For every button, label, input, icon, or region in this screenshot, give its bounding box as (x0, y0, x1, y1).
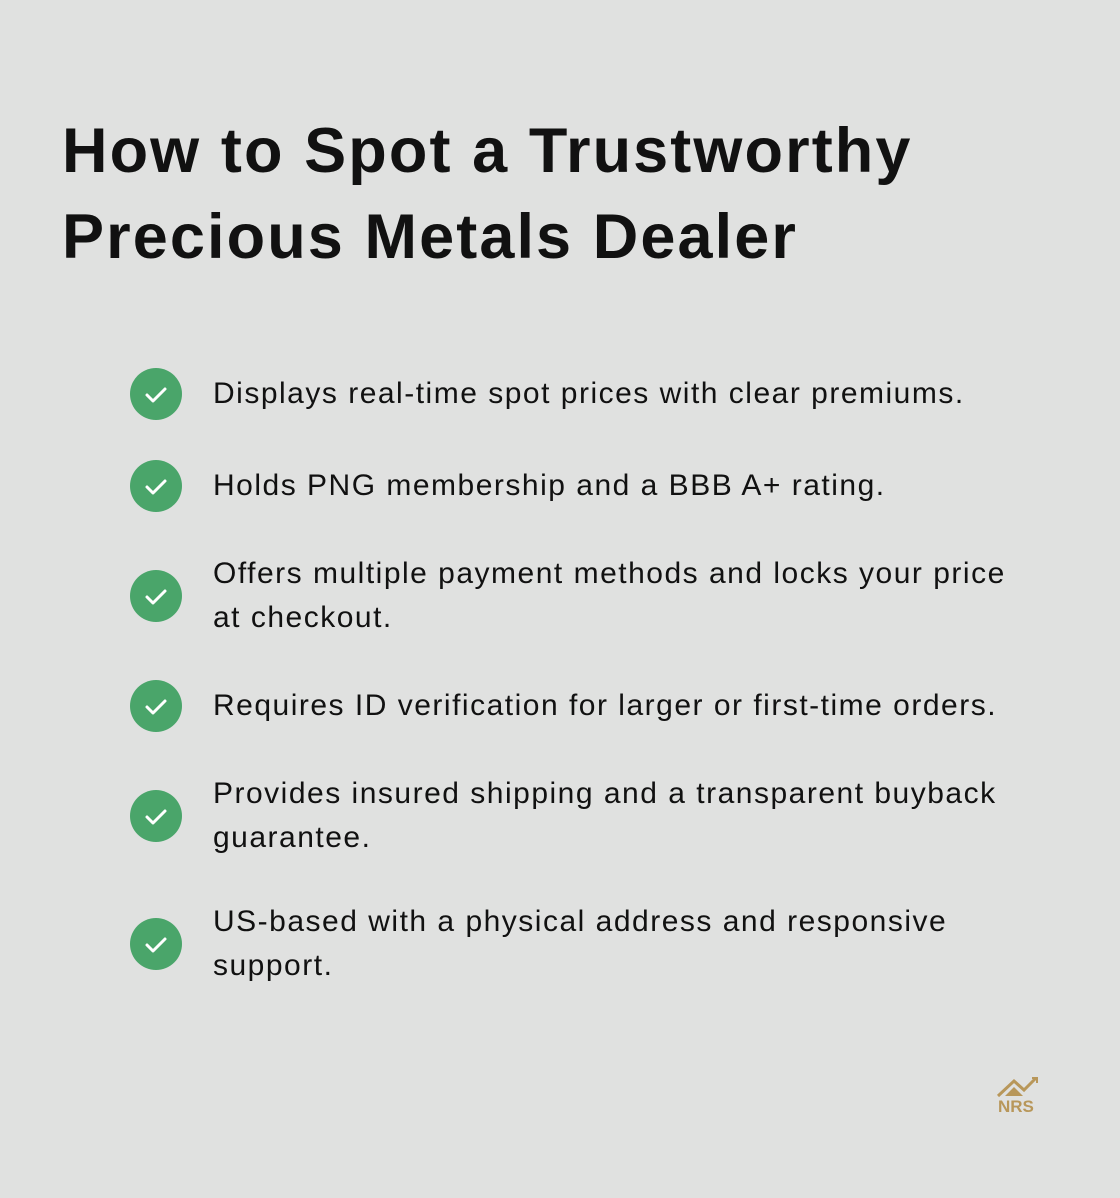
item 3: at checkout. (213, 601, 393, 634)
item 5: Provides insured shipping and a transparent buyback (213, 777, 997, 810)
item 1: Displays real-time spot prices with clear premiums. (213, 377, 965, 410)
item 4: Requires ID verification for larger or first-time orders. (213, 689, 997, 722)
item 3 (130, 557, 1006, 634)
item 6 (130, 905, 947, 982)
item 6: support. (213, 949, 333, 982)
item 2: Holds PNG membership and a BBB A+ rating. (213, 469, 886, 502)
item 1 (130, 368, 965, 420)
item 3: Offers multiple payment methods and locks your price (213, 557, 1006, 590)
logo: NRS (997, 1077, 1038, 1115)
title: How to Spot a Trustworthy (62, 116, 912, 186)
item 6: US-based with a physical address and responsive (213, 905, 947, 938)
item 2 (130, 460, 886, 512)
item 5 (130, 777, 997, 854)
item 5: guarantee. (213, 821, 371, 854)
item 4 (130, 680, 997, 732)
title (62, 116, 912, 272)
title: Precious Metals Dealer (62, 202, 798, 272)
